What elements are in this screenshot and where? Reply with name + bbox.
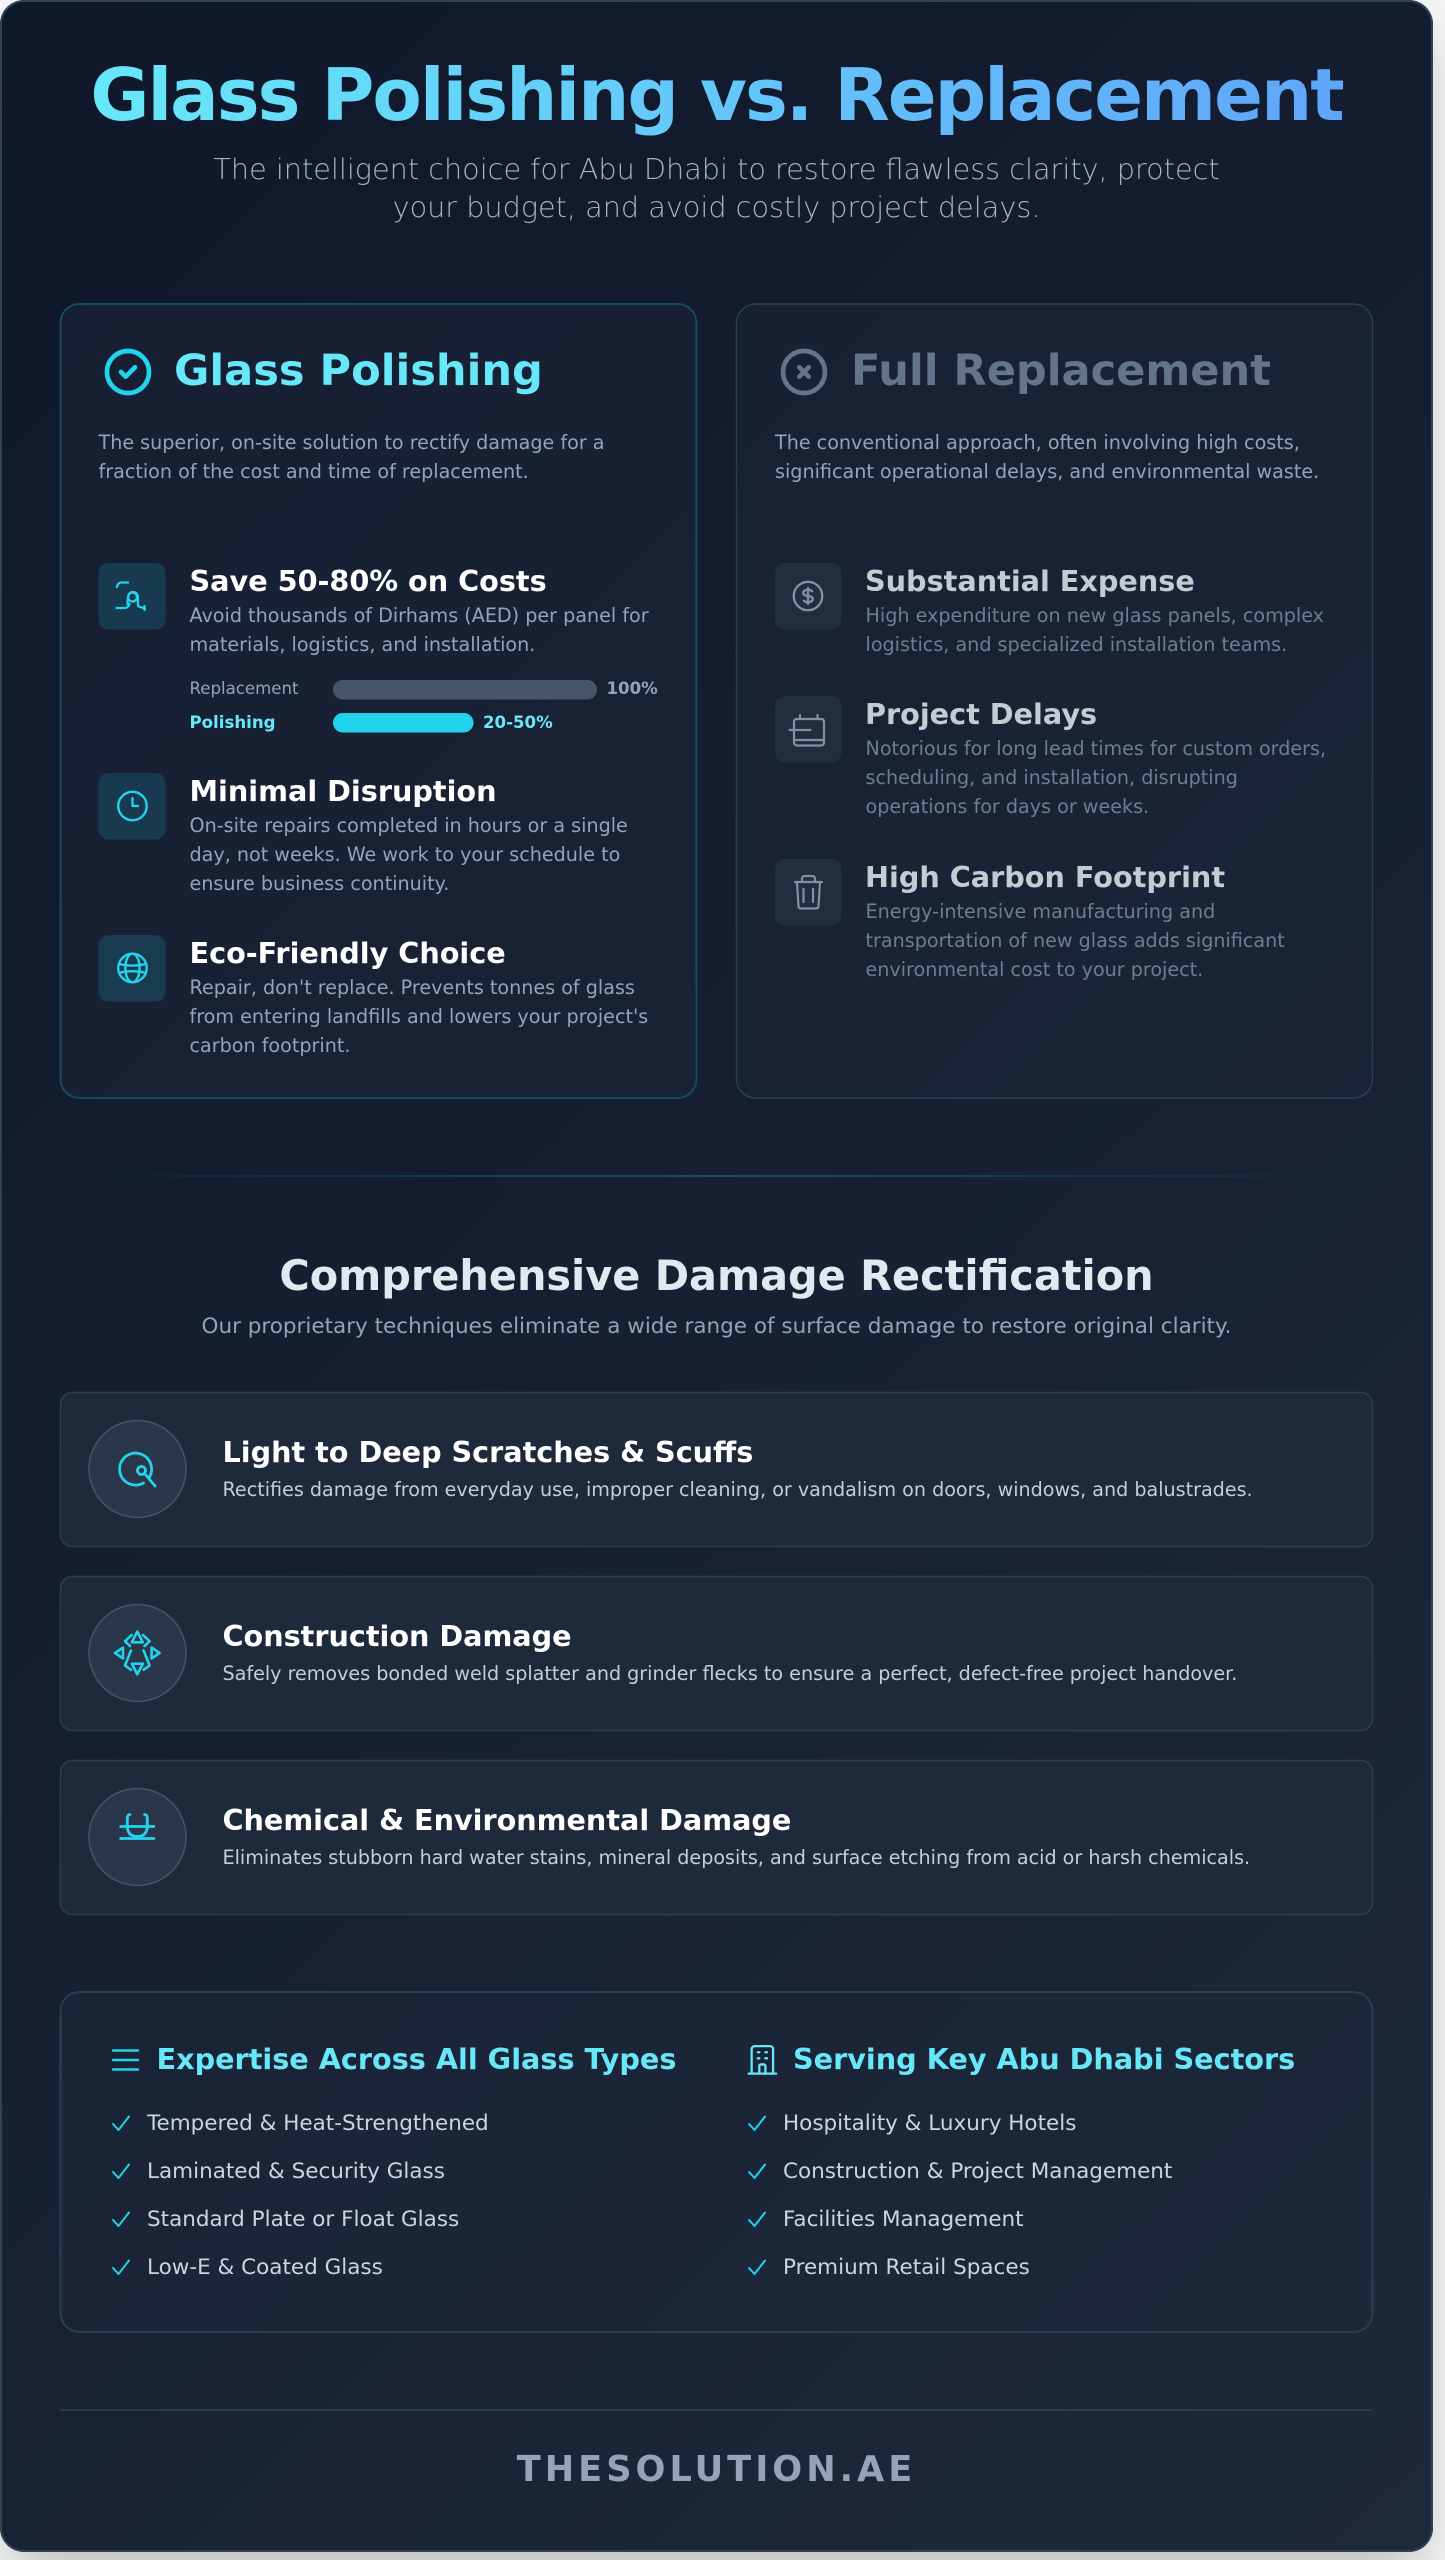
- panel background: [736, 304, 1372, 1098]
- feature heading: Project Delays: [865, 697, 1097, 731]
- glass type list: Standard Plate or Float Glass: [147, 2207, 459, 2232]
- column: glass types: [113, 2042, 676, 2280]
- feature description: operations for days or weeks.: [866, 795, 1149, 818]
- icon: trash: [775, 859, 842, 926]
- feature description: transportation of new glass adds significant: [866, 929, 1285, 952]
- heading: Comprehensive Damage Rectification: [279, 1252, 1154, 1300]
- value: 20-50%: 20-50%: [483, 713, 553, 732]
- glass type list: [113, 2111, 489, 2280]
- bar chart: cost comparison: [190, 679, 658, 732]
- glass type list: Tempered & Heat-Strengthened: [146, 2111, 489, 2136]
- feature description: Notorious for long lead times for custom orders,: [866, 737, 1326, 760]
- icon: office building: [749, 2046, 776, 2074]
- subtitle: your budget, and avoid costly project delays.: [393, 190, 1040, 224]
- value: 100%: 100%: [606, 679, 658, 698]
- sector list: Facilities Management: [783, 2207, 1024, 2232]
- icon: water stain beaker: [89, 1788, 186, 1886]
- feature description: Energy-intensive manufacturing and: [866, 900, 1215, 923]
- panel background: [60, 1992, 1372, 2332]
- sector list: Construction & Project Management: [783, 2159, 1172, 2184]
- sector list: [749, 2111, 1172, 2280]
- sector list: Premium Retail Spaces: [783, 2255, 1030, 2280]
- feature description: Avoid thousands of Dirhams (AED) per panel for: [190, 604, 649, 627]
- card background: [60, 1576, 1372, 1730]
- card description: Safely removes bonded weld splatter and grinder flecks to ensure a perfect, defect-free project handover.: [222, 1662, 1237, 1685]
- feature description: materials, logistics, and installation.: [190, 633, 535, 656]
- card description: Rectifies damage from everyday use, improper cleaning, or vandalism on doors, windows, and balustrades.: [222, 1478, 1253, 1501]
- panel description: significant operational delays, and environmental waste.: [775, 460, 1319, 483]
- feature: project delays: [775, 696, 1326, 818]
- icon: clock: [98, 773, 166, 840]
- card: scratches and scuffs: [60, 1392, 1372, 1546]
- feature description: environmental cost to your project.: [866, 958, 1203, 981]
- feature description: High expenditure on new glass panels, complex: [866, 604, 1324, 627]
- bar label: replacement: Replacement: [190, 679, 299, 698]
- section heading: damage rectification: [202, 1252, 1231, 1339]
- column: sectors: [749, 2042, 1295, 2280]
- card: construction damage: [60, 1576, 1372, 1730]
- icon: magnifier: [89, 1420, 186, 1518]
- icon: savings: [98, 563, 166, 630]
- glass type list: Laminated & Security Glass: [147, 2159, 445, 2184]
- panel heading: Full Replacement: [851, 346, 1271, 396]
- feature description: logistics, and specialized installation teams.: [866, 633, 1287, 656]
- feature: eco-friendly: [98, 935, 648, 1057]
- icon: globe: [98, 935, 166, 1002]
- icon: dollar: [775, 563, 842, 630]
- panel: expertise and sectors: [60, 1992, 1372, 2332]
- card heading: Light to Deep Scratches & Scuffs: [222, 1435, 753, 1469]
- feature heading: Save 50-80% on Costs: [190, 564, 547, 598]
- feature description: from entering landfills and lowers your project's: [190, 1005, 648, 1028]
- panel description: The superior, on-site solution to rectify damage for a: [98, 431, 605, 454]
- title: Glass Polishing vs. Replacement: [90, 53, 1343, 137]
- section subheading: Our proprietary techniques eliminate a wide range of surface damage to restore original clarity.: [202, 1314, 1231, 1339]
- card: chemical and environmental damage: [60, 1760, 1372, 1914]
- bar: polishing 20-50%: [333, 713, 474, 732]
- glass type list: Low-E & Coated Glass: [147, 2255, 383, 2280]
- panel description: fraction of the cost and time of replacement.: [98, 460, 529, 483]
- column heading: Serving Key Abu Dhabi Sectors: [793, 2042, 1295, 2076]
- feature heading: Eco-Friendly Choice: [190, 936, 506, 970]
- feature: high carbon footprint: [775, 859, 1285, 981]
- feature heading: Minimal Disruption: [190, 774, 497, 808]
- icon: x circle: [783, 351, 825, 393]
- feature description: On-site repairs completed in hours or a single: [190, 814, 628, 837]
- footer brand: THESOLUTION.AE: [517, 2449, 916, 2490]
- card heading: Chemical & Environmental Damage: [222, 1803, 791, 1837]
- panel description: The conventional approach, often involving high costs,: [774, 431, 1300, 454]
- feature: minimal disruption: [98, 773, 628, 895]
- feature description: scheduling, and installation, disrupting: [866, 766, 1238, 789]
- card background: [60, 1392, 1372, 1546]
- header: [90, 53, 1343, 224]
- card heading: Construction Damage: [222, 1619, 572, 1653]
- icon: menu lines: [113, 2050, 138, 2070]
- panel heading: Glass Polishing: [174, 346, 543, 396]
- icon: calendar: [775, 696, 842, 762]
- feature: substantial expense: [775, 563, 1324, 656]
- feature description: carbon footprint.: [190, 1034, 350, 1057]
- feature description: day, not weeks. We work to your schedule to: [190, 843, 620, 866]
- sector list: Hospitality & Luxury Hotels: [783, 2111, 1076, 2136]
- feature heading: High Carbon Footprint: [865, 860, 1225, 894]
- card background: [60, 1760, 1372, 1914]
- card description: Eliminates stubborn hard water stains, mineral deposits, and surface etching from acid or harsh chemicals.: [222, 1846, 1250, 1869]
- icon: debris directions: [89, 1604, 186, 1702]
- feature heading: Substantial Expense: [865, 564, 1195, 598]
- subtitle: The intelligent choice for Abu Dhabi to restore flawless clarity, protect: [213, 152, 1220, 186]
- feature description: ensure business continuity.: [190, 872, 449, 895]
- bar: replacement 100%: [333, 680, 597, 700]
- bar label: polishing: Polishing: [190, 713, 276, 732]
- icon: check circle: [107, 351, 149, 393]
- feature description: Repair, don't replace. Prevents tonnes of glass: [190, 976, 635, 999]
- panel: full replacement: [736, 304, 1372, 1098]
- column heading: Expertise Across All Glass Types: [156, 2042, 676, 2076]
- panel: glass polishing: [60, 304, 696, 1098]
- feature: save costs: [98, 563, 658, 732]
- panel background: [60, 304, 696, 1098]
